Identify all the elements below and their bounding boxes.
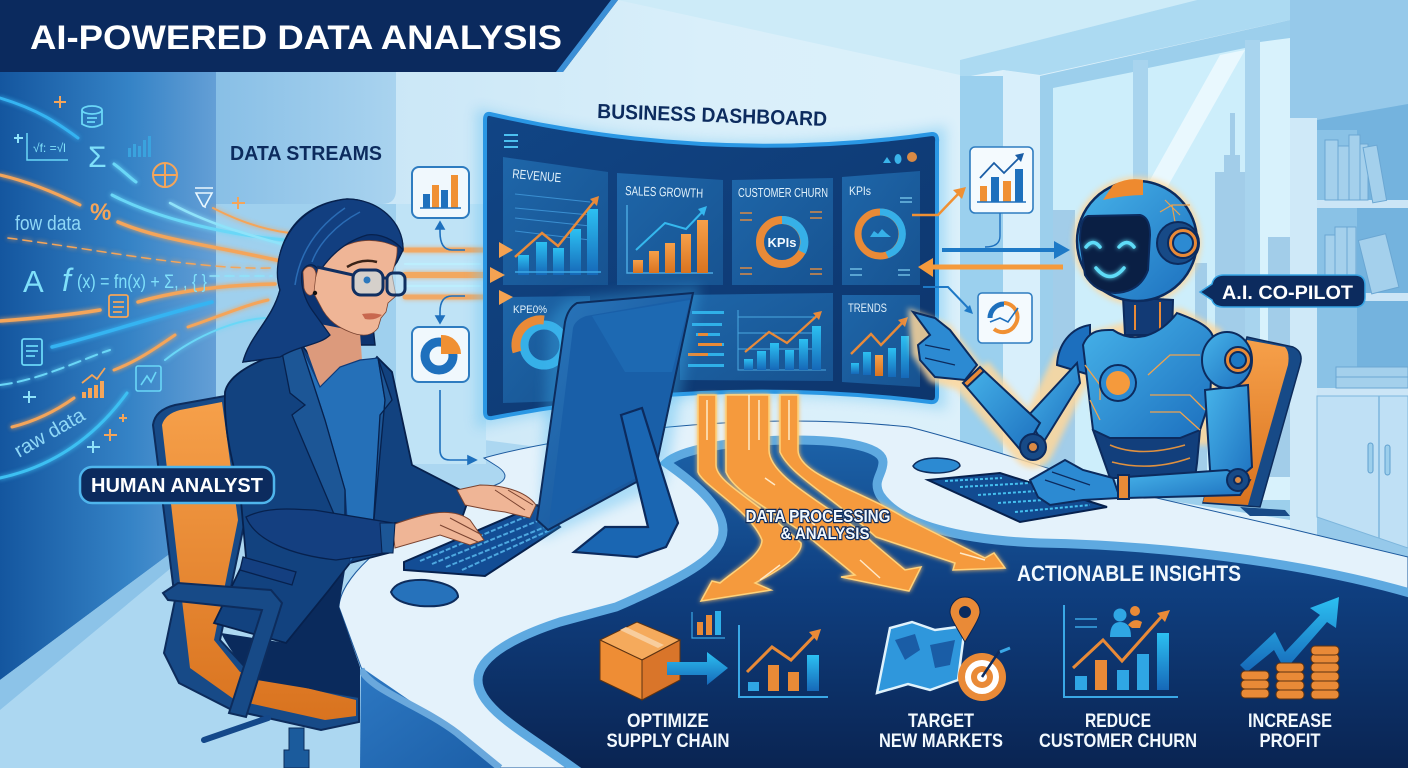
icon: arrow: [667, 652, 728, 685]
tile: kpe ring: KPE0%: [513, 304, 547, 316]
tile: kpis: KPIs: [849, 184, 871, 198]
window glass: [1040, 20, 1290, 520]
smile: [1086, 242, 1134, 276]
data processing arrows: & ANALYSIS: [780, 524, 870, 543]
formula text: [10, 141, 207, 462]
computer monitor: [537, 285, 700, 557]
hands: [457, 485, 536, 518]
icon: target: [958, 648, 1010, 701]
icon: pin: [950, 597, 980, 642]
shelves: [1317, 200, 1408, 396]
icon: box: [600, 622, 680, 700]
pointing hand: [913, 312, 977, 380]
cabinet: [1317, 396, 1408, 548]
tile: trends: [842, 295, 920, 387]
icon card: refresh gauge: [978, 293, 1032, 343]
face: [312, 240, 397, 335]
sleeve and pocket: [240, 509, 393, 585]
flow arrows into dashboard: [490, 242, 513, 305]
neck: [305, 322, 362, 387]
icon: people: [1110, 606, 1142, 637]
books: [1325, 135, 1408, 388]
formula text: f: [62, 262, 74, 298]
insight: optimize supply chain: OPTIMIZE: [627, 710, 709, 732]
tile: customer churn: [732, 178, 833, 285]
mouse: human: [391, 580, 458, 606]
chair armrest: human: [163, 583, 282, 717]
face screen: [1080, 215, 1150, 293]
icon: chart: [739, 625, 828, 697]
right forearm: [1127, 470, 1250, 498]
monitor stand: [574, 408, 678, 557]
data processing arrows: DATA PROCESSING: [746, 506, 890, 526]
core: [1100, 365, 1136, 401]
formula text: raw data: [10, 404, 90, 462]
helmet: [1077, 181, 1197, 301]
data streams: [0, 98, 499, 478]
shirt: [300, 343, 385, 563]
right shoulder: [1202, 332, 1252, 388]
icon: form: [109, 295, 128, 317]
window column: [960, 76, 1003, 476]
ear: [303, 267, 316, 295]
tile: customer churn: CUSTOMER CHURN: [738, 185, 828, 200]
left upper arm: [1027, 363, 1080, 443]
insight: optimize supply chain: [600, 611, 828, 752]
ai co-pilot label: [1200, 275, 1365, 307]
icon: pie outline: [153, 163, 177, 187]
title banner: [0, 0, 618, 72]
human analyst label: [80, 467, 274, 503]
tile: sales growth: [617, 173, 723, 285]
torso: [1083, 313, 1213, 438]
data streams heading: DATA STREAMS: [230, 142, 382, 165]
formula text: A: [23, 264, 44, 299]
keyboard: human: [404, 505, 560, 576]
formula text: (x) = fn(x) + Σ, , { }: [77, 272, 207, 293]
robot connector arrows: [912, 187, 1070, 314]
icon: small chart: [692, 611, 725, 638]
icon: document: [22, 339, 42, 365]
glasses: [317, 267, 405, 295]
formula text: √f: =√l: [33, 141, 66, 155]
icon: coins: [1241, 646, 1339, 699]
icon: map: [877, 622, 965, 693]
status icons: [883, 152, 917, 164]
insight: increase profit: INCREASE: [1248, 710, 1332, 732]
tile: customer churn: KPIs: [768, 235, 796, 250]
human analyst label: HUMAN ANALYST: [91, 475, 263, 497]
insight: increase profit: [1240, 597, 1339, 752]
chair: human analyst: [153, 396, 359, 768]
navy insight floor: [478, 440, 1408, 768]
tile: kpe ring: [503, 296, 590, 403]
city skyline: [1053, 113, 1290, 480]
right upper arm: [1205, 385, 1252, 490]
insight: optimize supply chain: SUPPLY CHAIN: [606, 730, 730, 752]
ear: [1157, 222, 1199, 264]
neck: [1123, 297, 1173, 335]
resting hand: [1030, 460, 1120, 505]
ai co-pilot label: A.I. CO-PILOT: [1222, 283, 1353, 304]
left forearm: [963, 367, 1040, 453]
icon: percent: %: [90, 199, 111, 226]
abdomen: [1093, 430, 1200, 478]
tile: kpis: [842, 171, 920, 285]
figure: robot co-pilot: [908, 177, 1252, 505]
icon card: bar chart: [412, 167, 469, 218]
insight: reduce customer churn: [1039, 605, 1197, 752]
title banner: AI-POWERED DATA ANALYSIS: [30, 19, 562, 57]
icon: rising arrow: [1240, 597, 1339, 672]
circuits: [1085, 355, 1205, 430]
left shoulder: [1057, 325, 1090, 375]
connector arrows: left cards: [436, 222, 476, 464]
dashboard heading: BUSINESS DASHBOARD: [597, 100, 827, 131]
floor: [0, 440, 1408, 768]
lapels: [282, 343, 392, 540]
icon card: pie chart: [412, 327, 469, 382]
insight: reduce customer churn: CUSTOMER CHURN: [1039, 730, 1197, 752]
menu icon: [504, 135, 518, 147]
formula text: Σ: [88, 141, 107, 174]
tile: sales growth: SALES GROWTH: [625, 183, 703, 201]
insight: reduce customer churn: REDUCE: [1085, 710, 1151, 732]
hair back: [243, 199, 403, 362]
icon: small chart: [82, 368, 105, 398]
icon: database: [82, 106, 102, 127]
formula text: fow data: [15, 213, 82, 235]
icon card: ai chart: [970, 147, 1033, 213]
hair front: [243, 199, 403, 362]
data processing arrows: [698, 395, 1005, 601]
keyboard and mouse: robot: [913, 458, 1107, 522]
orange halo: [908, 177, 1222, 447]
actionable insights heading: ACTIONABLE INSIGHTS: [1017, 561, 1241, 586]
icon: funnel: [195, 188, 213, 207]
panel: data streams backdrop: [0, 70, 486, 710]
insight: target new markets: TARGET: [908, 710, 974, 732]
tile: revenue: [503, 157, 608, 285]
tile: trends: TRENDS: [848, 301, 887, 315]
brow and lips: [347, 261, 377, 267]
insight: target new markets: NEW MARKETS: [879, 730, 1003, 752]
blazer: [214, 343, 470, 643]
icon: bar cluster: [128, 136, 151, 157]
data symbols and formulas: [10, 96, 245, 462]
insight: increase profit: PROFIT: [1260, 730, 1321, 752]
figure: human analyst: [214, 199, 536, 697]
legs: [221, 570, 360, 697]
small plus signs: [54, 96, 245, 441]
icon: graph card: [136, 366, 161, 391]
panel: business dashboard: [476, 108, 946, 428]
chair: robot: [1203, 337, 1301, 516]
tile: revenue: REVENUE: [512, 166, 562, 185]
desk: [339, 421, 1408, 768]
bookshelf and cabinet: [1290, 0, 1408, 560]
insight: target new markets: [877, 597, 1010, 752]
tile: lower chart: [680, 293, 833, 381]
